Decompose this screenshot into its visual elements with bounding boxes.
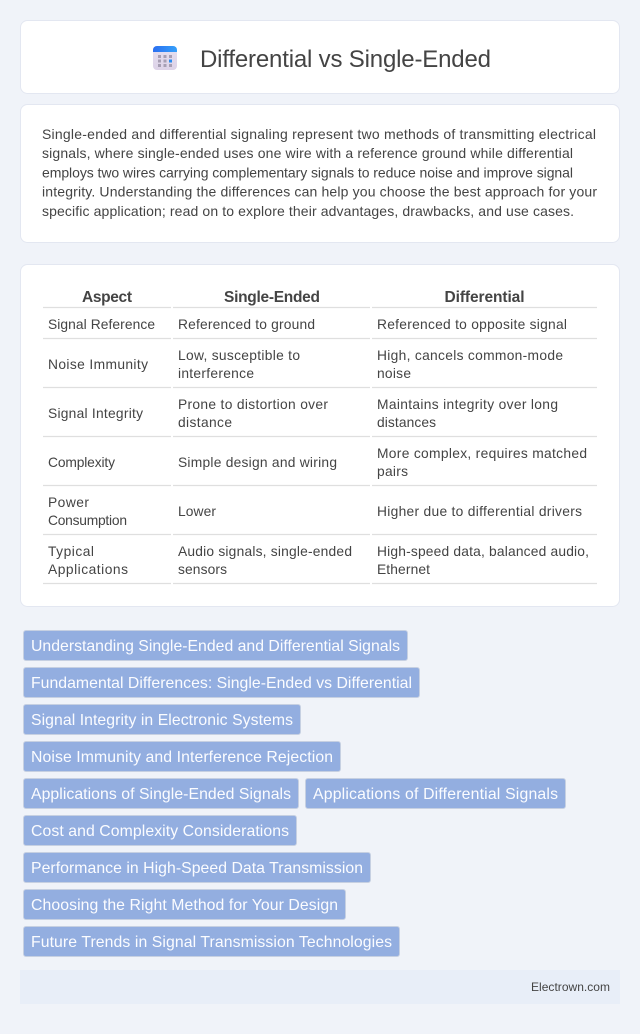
tag: cost and complexity: Cost and Complexity Considerations [31, 823, 289, 840]
row: power consumption: Power [48, 495, 89, 510]
tag: noise immunity: Noise Immunity and Interference Rejection [31, 749, 333, 766]
panel: introduction [20, 104, 620, 242]
tag: signal integrity: Signal Integrity in Electronic Systems [31, 712, 293, 729]
tag: fundamental differences: Fundamental Differences: Single-Ended vs Differential [31, 675, 412, 692]
tag: choosing method: Choosing the Right Method for Your Design [31, 897, 338, 914]
intro text block [42, 126, 597, 219]
intro text block: employs two wires carrying complementary signals to reduce noise and improve signal [42, 164, 573, 180]
tag: cost and complexity [24, 816, 296, 846]
row: complexity: More complex, requires matched [377, 446, 587, 461]
row: typical applications: Ethernet [377, 562, 430, 577]
tag: differential applications: Applications of Differential Signals [313, 786, 558, 803]
row: noise immunity [48, 348, 563, 381]
row: complexity: Complexity [48, 455, 115, 470]
table header: Single-Ended [224, 289, 320, 306]
table header: Aspect [82, 289, 132, 306]
row: power consumption [48, 495, 582, 528]
icon: calendar [153, 46, 177, 70]
row: noise immunity: interference [178, 366, 254, 381]
tag: single-ended applications [24, 778, 298, 808]
row: power consumption: Higher due to differential drivers [377, 504, 582, 519]
table header: Differential [444, 289, 524, 306]
row: signal reference: Referenced to opposite signal [377, 317, 567, 332]
row: signal reference: Signal Reference [48, 317, 155, 332]
tag: future trends [24, 926, 400, 956]
tag list [24, 630, 566, 956]
tag: understanding [24, 630, 408, 660]
tag: single-ended applications: Applications of Single-Ended Signals [31, 786, 291, 803]
tag: future trends: Future Trends in Signal Transmission Technologies [31, 934, 392, 951]
row: typical applications: Audio signals, single-ended [178, 544, 352, 559]
tag: differential applications [306, 778, 566, 808]
row: signal integrity: Signal Integrity [48, 406, 143, 421]
row: signal reference: Referenced to ground [178, 317, 315, 332]
footer credit: Electrown.com [531, 980, 610, 994]
row: noise immunity: Low, susceptible to [178, 348, 300, 363]
row: typical applications: High-speed data, balanced audio, [377, 544, 589, 559]
table header [82, 289, 524, 306]
footer [20, 970, 620, 1004]
row: noise immunity: noise [377, 366, 411, 381]
row: signal integrity: Maintains integrity over long [377, 397, 558, 412]
row: signal integrity: distances [377, 415, 436, 430]
tag: fundamental differences [24, 668, 420, 698]
row: typical applications: sensors [178, 562, 227, 577]
row: noise immunity: High, cancels common-mode [377, 348, 563, 363]
tag: noise immunity [24, 742, 340, 772]
intro text block: specific application; read on to explore their advantages, drawbacks, and use cases. [42, 203, 574, 219]
row: noise immunity: Noise Immunity [48, 357, 148, 372]
intro text block: integrity. Understanding the differences can help you choose the best approach for your [42, 184, 597, 200]
row: signal integrity: distance [178, 415, 232, 430]
row: signal integrity: Prone to distortion over [178, 397, 328, 412]
row: complexity: Simple design and wiring [178, 455, 337, 470]
tag: signal integrity [24, 704, 300, 734]
row: typical applications: Typical [48, 544, 94, 559]
row: signal reference [48, 317, 567, 332]
row: signal integrity [48, 397, 558, 430]
tag: high-speed performance: Performance in High-Speed Data Transmission [31, 860, 363, 877]
title: Differential vs Single-Ended [200, 46, 491, 73]
row: typical applications [48, 544, 589, 577]
header panel [20, 20, 620, 94]
panel: comparison table [20, 264, 620, 606]
row: power consumption: Lower [178, 504, 216, 519]
tag: high-speed performance [24, 852, 370, 882]
row: complexity: pairs [377, 464, 408, 479]
intro text block: Single-ended and differential signaling represent two methods of transmitting electrical [42, 126, 596, 142]
row: complexity [48, 446, 587, 479]
tag: choosing method [24, 890, 346, 920]
row: typical applications: Applications [48, 562, 128, 577]
tag: understanding: Understanding Single-Ended and Differential Signals [31, 638, 400, 655]
intro text block: signals, where single-ended uses one wire with a reference ground while differential [42, 145, 573, 161]
row: power consumption: Consumption [48, 513, 127, 528]
